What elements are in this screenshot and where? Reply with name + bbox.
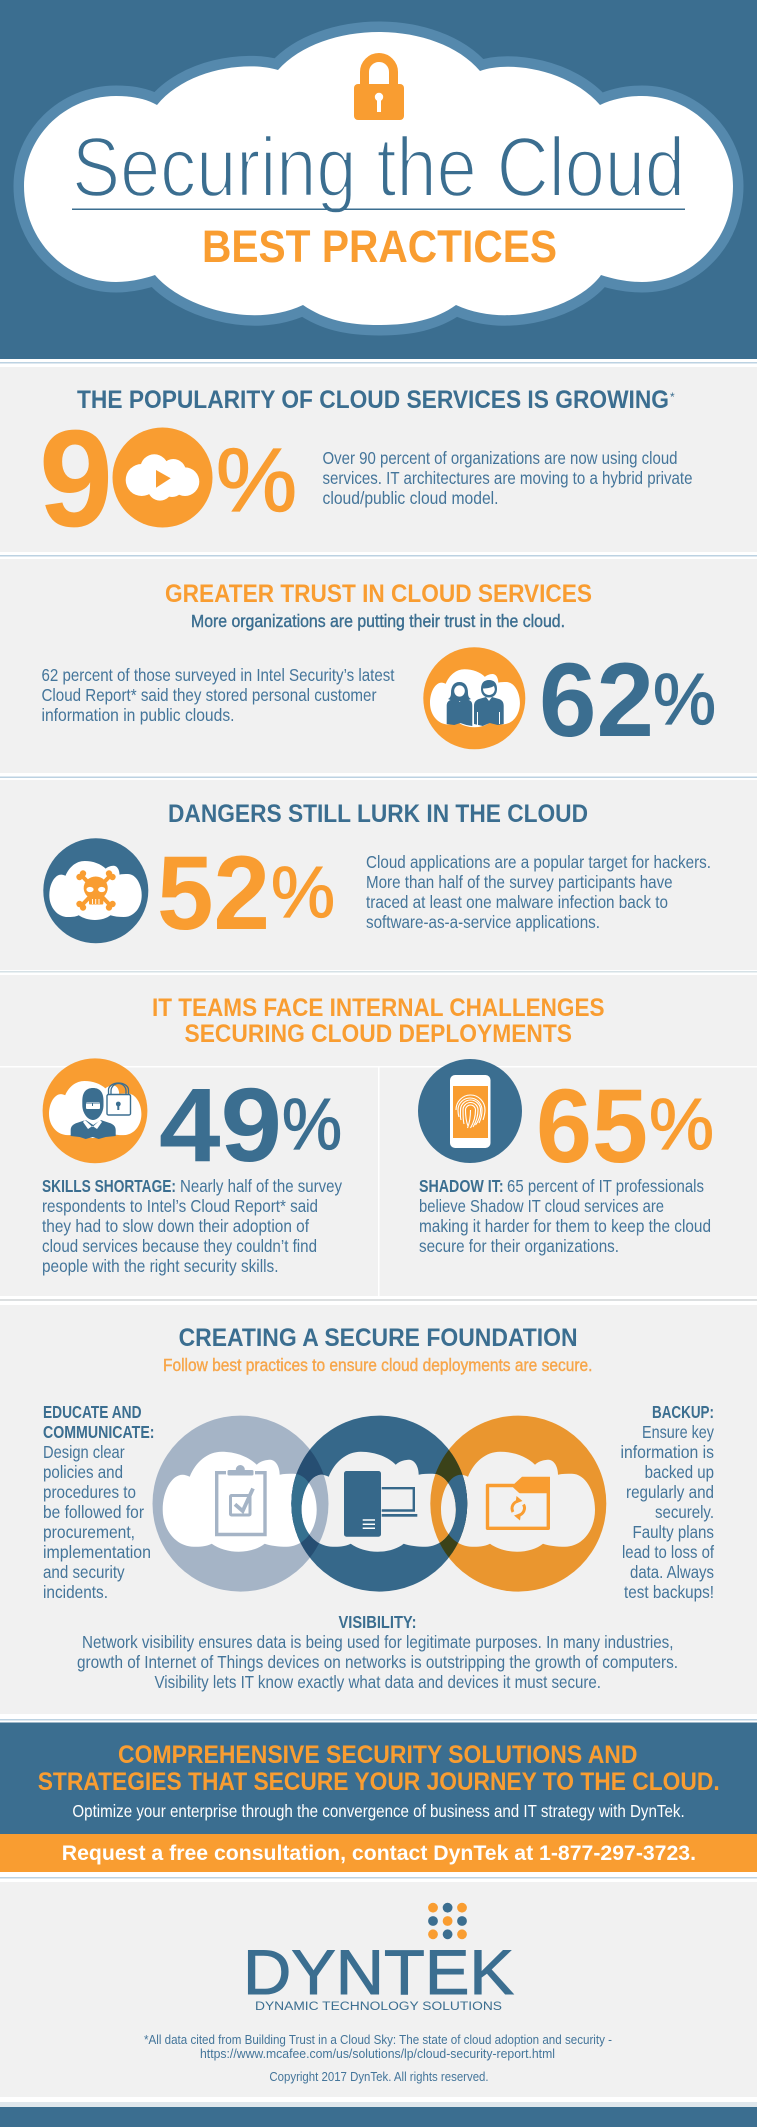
heading: SECURING CLOUD DEPLOYMENTS [184,1020,572,1048]
stat: 52 percent: % [271,853,335,933]
text block: skills shortage: people with the right security skills. [42,1256,278,1276]
text block: visibility: Visibility lets IT know exactly what data and devices it must secure. [154,1672,601,1692]
text block [366,852,711,932]
stat: 52 percent [157,835,335,952]
text block: cloud/public cloud model. [322,488,498,508]
text block: educate and communicate: COMMUNICATE: [43,1422,154,1442]
text block: backup: data. Always [630,1562,714,1582]
heading: IT TEAMS FACE INTERNAL CHALLENGES [152,994,604,1022]
text block: traced at least one malware infection back to [366,892,668,912]
stat: 90 percent: 9 [39,402,113,556]
text block: shadow IT [419,1176,711,1256]
heading [152,994,604,1048]
text block: shadow IT: SHADOW IT: [419,1176,504,1196]
heading: DANGERS STILL LURK IN THE CLOUD [168,800,588,828]
text block: educate and communicate: be followed for [43,1502,144,1522]
stat: 49 percent: 49 [159,1067,282,1184]
text block: educate and communicate: incidents. [43,1582,108,1602]
stat: 62 percent [539,642,716,759]
venn diagram of clouds [152,1416,606,1592]
text block: skills shortage [42,1176,342,1276]
text block: visibility: growth of Internet of Things devices on networks is outstripping the growth of computers. [77,1652,678,1672]
heading [38,1741,720,1796]
stat: 65 percent: 65 [536,1068,648,1185]
text block: backup [620,1402,714,1602]
text block: visibility: VISIBILITY: [338,1612,416,1632]
text block: information in public clouds. [42,705,234,725]
text block: educate and communicate: and security [43,1562,125,1582]
text block: skills shortage: they had to slow down their adoption of [42,1216,309,1236]
icon: padlock [354,57,404,120]
text block: skills shortage: cloud services because they couldn’t find [42,1236,317,1256]
text block: More than half of the survey participants have [366,872,673,892]
text block: software-as-a-service applications. [366,912,600,932]
bottom band [0,2107,757,2127]
stat: 65 percent: % [649,1085,714,1165]
copyright: Copyright 2017 DynTek. All rights reserved. [269,2069,489,2084]
text block: backup: Faulty plans [632,1522,714,1542]
text block: skills shortage: Nearly half of the survey [180,1176,342,1196]
icon: server and laptop [344,1471,417,1537]
panel: call to action [0,1722,757,1872]
text block: educate and communicate: implementation [43,1542,151,1562]
text block: skills shortage: SKILLS SHORTAGE: [42,1176,176,1196]
stat: 52 percent: 52 [157,835,270,952]
contact banner: Request a free consultation, contact DynTek at 1-877-297-3723. [62,1842,696,1865]
heading: CREATING A SECURE FOUNDATION [179,1324,578,1352]
text block: educate and communicate: procurement, [43,1522,135,1542]
panel: footer [0,1882,757,2097]
text block: backup: lead to loss of [622,1542,714,1562]
text block: visibility [77,1612,678,1692]
text block: backup: securely. [655,1502,714,1522]
stat: 49 percent: % [282,1085,342,1165]
footnote: https://www.mcafee.com/us/solutions/lp/cloud-security-report.html [200,2046,555,2061]
contact banner [0,1834,757,1872]
icon: skull in cloud [43,838,148,943]
stat: 62 percent: % [653,660,716,740]
text block: backup: information is [620,1442,714,1462]
text block: backup: regularly and [626,1482,714,1502]
text block: backup: BACKUP: [652,1402,714,1422]
text block: visibility: Network visibility ensures data is being used for legitimate purposes. In many industries, [82,1632,674,1652]
subtitle: BEST PRACTICES [202,221,557,272]
footnote [144,2032,612,2061]
text block: Over 90 percent of organizations are now using cloud [322,448,678,468]
text block: services. IT architectures are moving to a hybrid private [322,468,692,488]
logo: DynTek: DYNTEK [243,1938,514,2008]
text block: educate and communicate: Design clear [43,1442,125,1462]
text block: educate and communicate [43,1402,154,1602]
panel: header [0,0,757,359]
stat: 65 percent [536,1068,714,1185]
icon: bearded man and lock [43,1058,147,1163]
icon: clipboard with checkmark [217,1465,265,1534]
icon: folder with sync arrows [488,1477,550,1528]
text block: shadow IT: believe Shadow IT cloud services are [419,1196,664,1216]
text block: educate and communicate: procedures to [43,1482,136,1502]
text block: backup: test backups! [624,1582,714,1602]
logo: DynTek: DYNAMIC TECHNOLOGY SOLUTIONS [255,2001,502,2013]
panel: popularity of cloud services [0,367,757,556]
icon: people in cloud [423,647,525,749]
text block: skills shortage: respondents to Intel’s Cloud Report* said [42,1196,318,1216]
text block: educate and communicate: policies and [43,1462,123,1482]
stat: 49 percent [159,1067,342,1184]
subheading: More organizations are putting their trust in the cloud. [191,611,565,631]
panel: internal challenges [0,975,757,1296]
panel: greater trust [0,559,757,773]
heading: GREATER TRUST IN CLOUD SERVICES [165,580,592,608]
panel: popularity of cloud services: * [670,390,675,404]
text block: 62 percent of those surveyed in Intel Security’s latest [42,665,395,685]
text block: Cloud Report* said they stored personal customer [42,685,377,705]
text block: shadow IT: secure for their organizations. [419,1236,619,1256]
text block: backup: Ensure key [642,1422,714,1442]
text block: educate and communicate: EDUCATE AND [43,1402,142,1422]
heading: COMPREHENSIVE SECURITY SOLUTIONS AND [118,1741,638,1769]
text block [42,665,395,725]
panel: secure foundation [0,1305,757,1714]
text block [322,448,692,508]
stat: 90 percent: % [216,431,297,531]
text block: backup: backed up [645,1462,714,1482]
logo: DynTek [243,1903,514,2013]
icon: phone with fingerprint [418,1059,522,1163]
subheading: Follow best practices to ensure cloud deployments are secure. [163,1355,592,1375]
header cloud [24,32,733,325]
heading: THE POPULARITY OF CLOUD SERVICES IS GROWING [77,386,669,414]
text block: shadow IT: making it harder for them to keep the cloud [419,1216,711,1236]
stat: 62 percent: 62 [539,642,654,759]
text block: shadow IT: 65 percent of IT professionals [507,1176,704,1196]
stat: 90 percent [39,402,297,556]
footnote: *All data cited from Building Trust in a Cloud Sky: The state of cloud adoption and security - [144,2032,612,2047]
text block: Cloud applications are a popular target for hackers. [366,852,711,872]
panel: dangers [0,780,757,970]
